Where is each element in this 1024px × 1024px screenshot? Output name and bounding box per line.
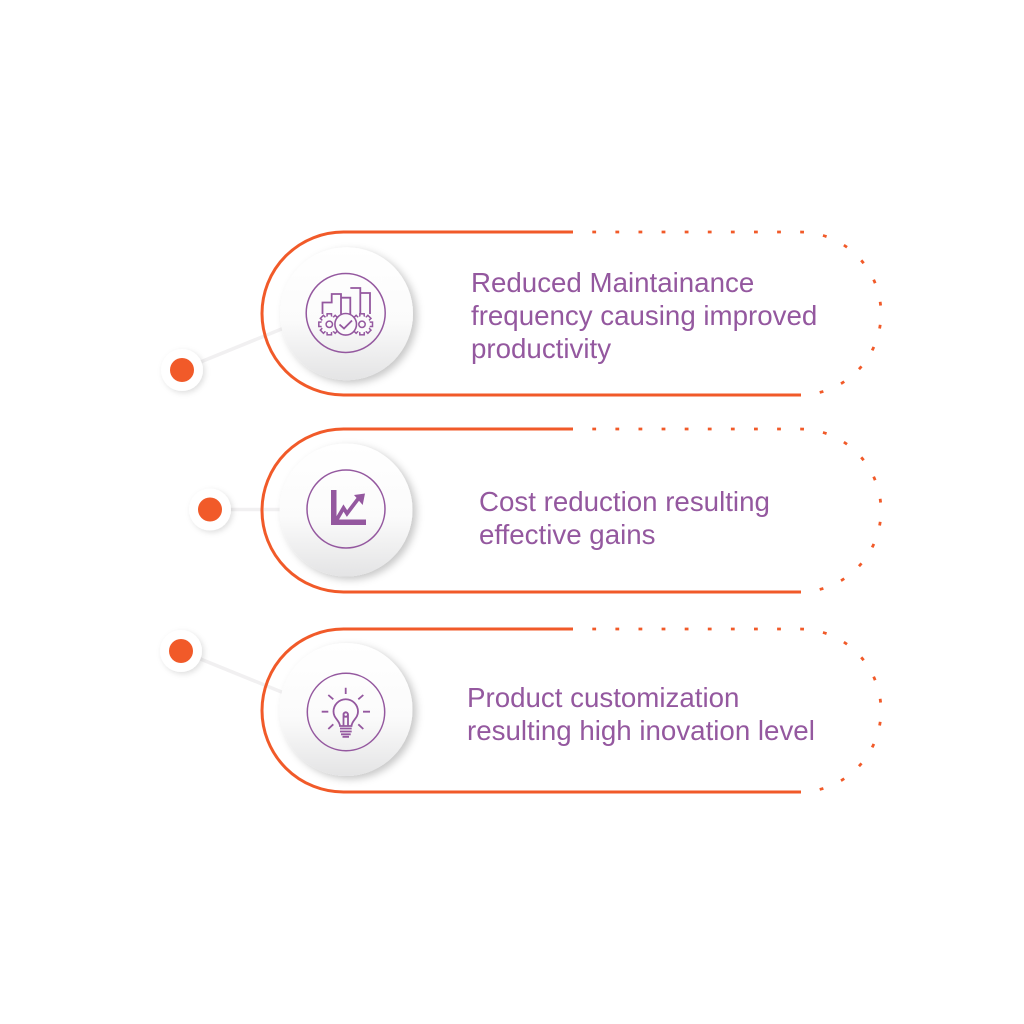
connector line 1 [198,328,284,363]
icon disc 3 [280,643,412,776]
pill outline dotted 1 [592,232,881,395]
icon: bar chart with gears and check [306,274,385,352]
icon disc 2 [280,444,412,576]
marker dot 2 [189,488,231,530]
connector line 3 [198,658,284,693]
text 3: resulting high inovation level [467,715,815,746]
item 2: cost reduction [189,429,881,592]
item 1: reduced maintenance [161,232,881,395]
pill outline dotted 2 [592,429,881,592]
text 1: Reduced Maintainance [471,267,754,298]
text 2: Cost reduction resulting [479,486,770,517]
marker dot 1 [161,349,203,391]
item 3: product customization [160,629,881,792]
connector line 2 [228,508,284,511]
text 3: Product customization [467,682,739,713]
pill outline solid 1 [262,232,801,395]
icon: rising chart arrow [307,470,385,548]
icon: light bulb [307,673,385,751]
text 1: frequency causing improved [471,300,817,331]
pill outline solid 3 [262,629,801,792]
text 1: productivity [471,333,611,364]
marker dot 3 [160,630,202,672]
pill outline solid 2 [262,429,801,592]
icon disc 1 [280,247,413,380]
text 2: effective gains [479,519,656,550]
pill outline dotted 3 [592,629,881,792]
